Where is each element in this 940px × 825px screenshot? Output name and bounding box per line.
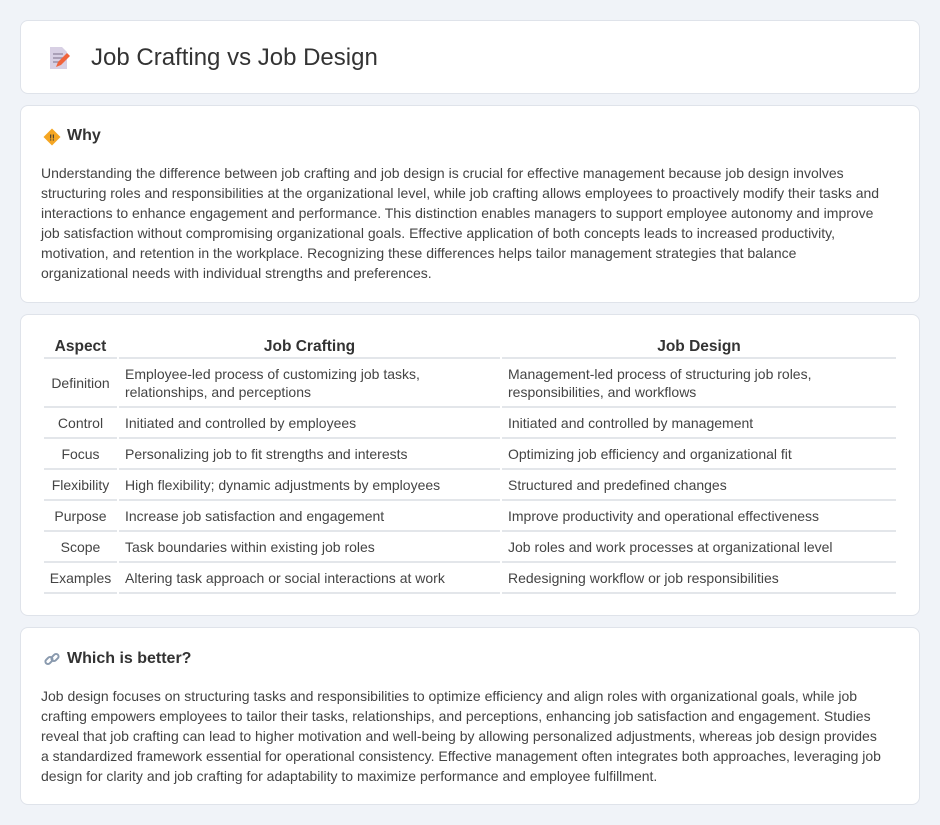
panel: header bbox=[20, 20, 920, 94]
table: comparison: Examples bbox=[50, 570, 111, 586]
table: comparison: Control bbox=[58, 414, 103, 430]
text: why paragraph: Understanding the difference between job crafting and job design is crucial for effective management because job design involves structuring roles and responsibilities at the organizational level, while job crafting allows employees to proactively modify their tasks and interactions to enhance engagement and performance. This distinction enables managers to support employee autonomy and improve job satisfaction without compromising organizational goals. Effective application of both concepts leads to increased productivity, motivation, and retention in the workplace. Recognizing these differences helps tailor management strategies that balance organizational needs with individual strengths and preferences. bbox=[41, 165, 879, 281]
icon: document with pencil bbox=[50, 47, 70, 69]
table: comparison: Definition bbox=[51, 374, 110, 390]
heading: why: Why bbox=[67, 127, 101, 144]
table: comparison: Improve productivity and operational effectiveness bbox=[508, 508, 819, 524]
table: comparison: Job Design bbox=[657, 338, 741, 355]
icon: link bbox=[44, 653, 60, 665]
table: comparison: Scope bbox=[61, 538, 100, 554]
heading: which is better: Which is better? bbox=[67, 650, 191, 667]
text: which is better paragraph: Job design focuses on structuring tasks and responsibilities to optimize efficiency and align roles with organizational goals, while job crafting empowers employees to tailor their tasks, relationships, and perceptions, enhancing job satisfaction and engagement. Studies reveal that job crafting can lead to higher motivation and well-being by allowing personalized adjustments, whereas job design provides a standardized framework essential for operational consistency. Effective management often integrates both approaches, leveraging job design for clarity and job crafting for adaptability to maximize performance and employee fulfillment. bbox=[41, 688, 881, 784]
table: comparison: Structured and predefined changes bbox=[508, 476, 727, 492]
table: comparison: High flexibility; dynamic adjustments by employees bbox=[125, 476, 440, 492]
table: comparison: Employee-led process of customizing job tasks, relationships, and perceptions bbox=[125, 366, 420, 400]
table: comparison: Management-led process of structuring job roles, responsibilities, and workflows bbox=[508, 366, 811, 400]
table: comparison: Task boundaries within existing job roles bbox=[125, 538, 375, 554]
table: comparison: Personalizing job to fit strengths and interests bbox=[125, 446, 408, 462]
table: comparison: Altering task approach or social interactions at work bbox=[125, 570, 445, 586]
panel: comparison table bbox=[20, 314, 920, 616]
table: comparison: Initiated and controlled by management bbox=[508, 414, 753, 430]
table: comparison: Optimizing job efficiency and organizational fit bbox=[508, 446, 792, 462]
table: comparison: Redesigning workflow or job responsibilities bbox=[508, 570, 779, 586]
table: comparison: Job Crafting bbox=[264, 338, 355, 355]
icon: why diamond bbox=[44, 128, 60, 146]
icon: why diamond: !! bbox=[49, 134, 55, 142]
table: comparison: Flexibility bbox=[52, 476, 109, 492]
table: comparison: Increase job satisfaction and engagement bbox=[125, 508, 384, 524]
panel: which is better bbox=[20, 627, 920, 805]
table: comparison: Aspect bbox=[55, 338, 106, 355]
table: comparison bbox=[44, 338, 896, 594]
panel: why bbox=[20, 105, 920, 303]
table: comparison: Job roles and work processes at organizational level bbox=[508, 538, 833, 554]
title: Job Crafting vs Job Design bbox=[91, 44, 378, 71]
table: comparison: Focus bbox=[61, 446, 100, 462]
table: comparison: Purpose bbox=[54, 508, 107, 524]
table: comparison: Initiated and controlled by employees bbox=[125, 414, 356, 430]
